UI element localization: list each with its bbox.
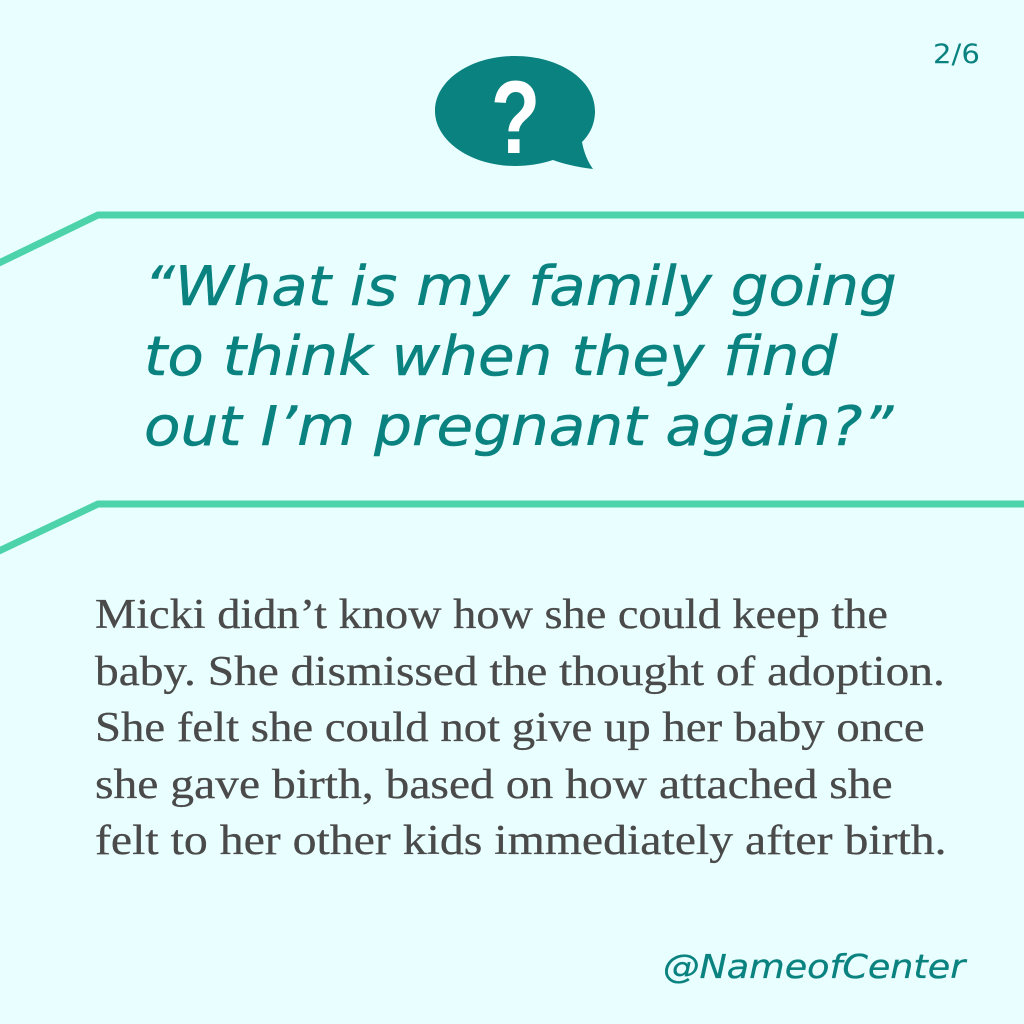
quote heading — [144, 255, 897, 458]
quote heading: to think when they find — [144, 325, 837, 388]
top divider line — [0, 212, 1024, 266]
page number: 2/6 — [933, 39, 980, 70]
quote heading: out I’m pregnant again?” — [144, 395, 893, 458]
body text: baby. She dismissed the thought of adoption. — [95, 648, 945, 694]
handle: @NameofCenter — [663, 947, 965, 986]
body text: she gave birth, based on how attached she — [95, 760, 893, 808]
body text: Micki didn’t know how she could keep the — [95, 591, 888, 638]
body text: felt to her other kids immediately after birth. — [95, 817, 947, 864]
body text — [94, 591, 947, 864]
body text: She felt she could not give up her baby once — [95, 704, 925, 751]
bottom divider line — [0, 500, 1024, 554]
icon: speech bubble with question mark: ? — [491, 59, 540, 175]
quote heading: “What is my family going — [144, 255, 897, 318]
icon: speech bubble with question mark — [434, 56, 595, 175]
